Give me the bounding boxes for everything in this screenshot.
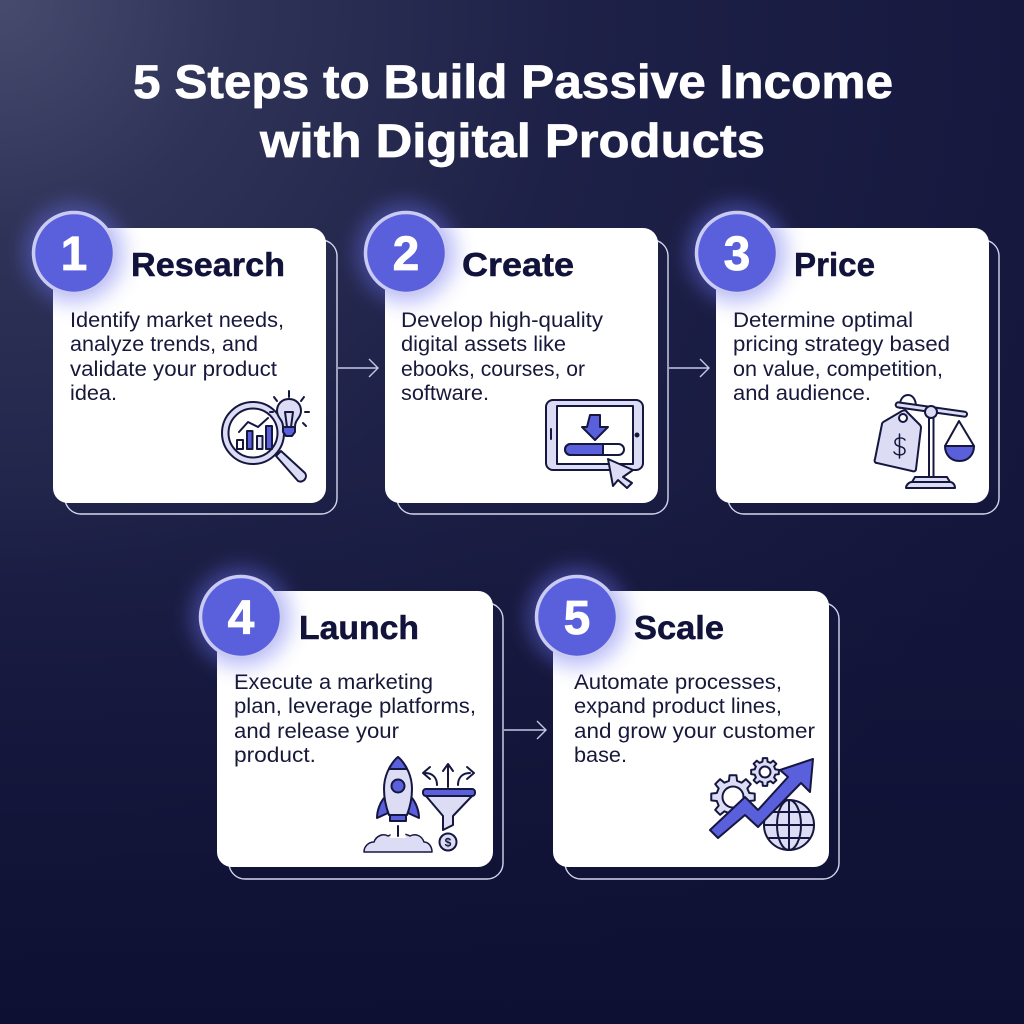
heading: research: Research bbox=[131, 246, 285, 283]
step number 1: 1 bbox=[61, 228, 87, 281]
panel: step 2 create bbox=[356, 203, 668, 514]
panel: step 1 research bbox=[24, 203, 337, 514]
description: price: and audience. bbox=[733, 382, 871, 405]
description: price: pricing strategy based bbox=[733, 333, 950, 356]
heading: launch: Launch bbox=[299, 609, 419, 646]
description: price: on value, competition, bbox=[733, 358, 943, 381]
icon: marketing funnel with arrows and coin bbox=[423, 764, 475, 850]
description: research: idea. bbox=[70, 382, 117, 405]
panel: step 4 launch bbox=[191, 567, 503, 879]
title: with Digital Products bbox=[259, 114, 765, 167]
description: scale: expand product lines, bbox=[574, 695, 782, 718]
step number 2: 2 bbox=[393, 228, 419, 281]
description: create: ebooks, courses, or bbox=[401, 358, 585, 381]
description: scale bbox=[574, 671, 815, 767]
icon: marketing funnel with arrows and coin: $ bbox=[445, 836, 452, 850]
description: research: Identify market needs, bbox=[70, 309, 284, 332]
description: research: validate your product bbox=[70, 358, 277, 381]
arrow: step 2 to 3 bbox=[669, 359, 709, 377]
heading: create: Create bbox=[462, 246, 574, 283]
arrow: step 4 to 5 bbox=[504, 721, 546, 739]
step number 5 bbox=[536, 576, 618, 658]
panel: step 5 scale bbox=[527, 567, 839, 879]
description: launch: and release your bbox=[234, 720, 399, 743]
step number 3 bbox=[696, 212, 778, 294]
heading: price: Price bbox=[794, 246, 875, 283]
icon: magnifier with chart and light bulb bbox=[222, 391, 309, 482]
step number 1 bbox=[34, 212, 114, 294]
description: research: analyze trends, and bbox=[70, 333, 258, 356]
description: create bbox=[401, 309, 604, 405]
step number 4 bbox=[200, 576, 282, 658]
description: launch: Execute a marketing bbox=[234, 671, 433, 694]
icon: tablet with download and cursor bbox=[546, 400, 643, 488]
description: create: software. bbox=[401, 382, 489, 405]
title: 5 Steps to Build Passive Income bbox=[133, 55, 893, 108]
description: create: digital assets like bbox=[401, 333, 566, 356]
icon: gears, growth arrow and globe bbox=[710, 758, 814, 850]
description: research bbox=[70, 309, 284, 405]
icon: price tag and balance scale bbox=[875, 395, 974, 488]
icon: rocket launch bbox=[364, 757, 432, 852]
panel: step 3 price bbox=[687, 203, 999, 514]
description: launch: product. bbox=[234, 744, 316, 767]
step number 4: 4 bbox=[228, 592, 255, 645]
description: scale: base. bbox=[574, 744, 627, 767]
description: launch: plan, leverage platforms, bbox=[234, 695, 476, 718]
description: scale: Automate processes, bbox=[574, 671, 782, 694]
description: create: Develop high-quality bbox=[401, 309, 604, 332]
description: price bbox=[733, 309, 950, 405]
arrow: step 1 to 2 bbox=[338, 359, 378, 377]
step number 5: 5 bbox=[564, 592, 590, 645]
heading: scale: Scale bbox=[634, 609, 724, 646]
description: price: Determine optimal bbox=[733, 309, 913, 332]
description: scale: and grow your customer bbox=[574, 720, 815, 743]
description: launch bbox=[234, 671, 476, 767]
step number 3: 3 bbox=[724, 228, 750, 281]
title bbox=[133, 55, 893, 167]
step number 2 bbox=[366, 212, 446, 294]
